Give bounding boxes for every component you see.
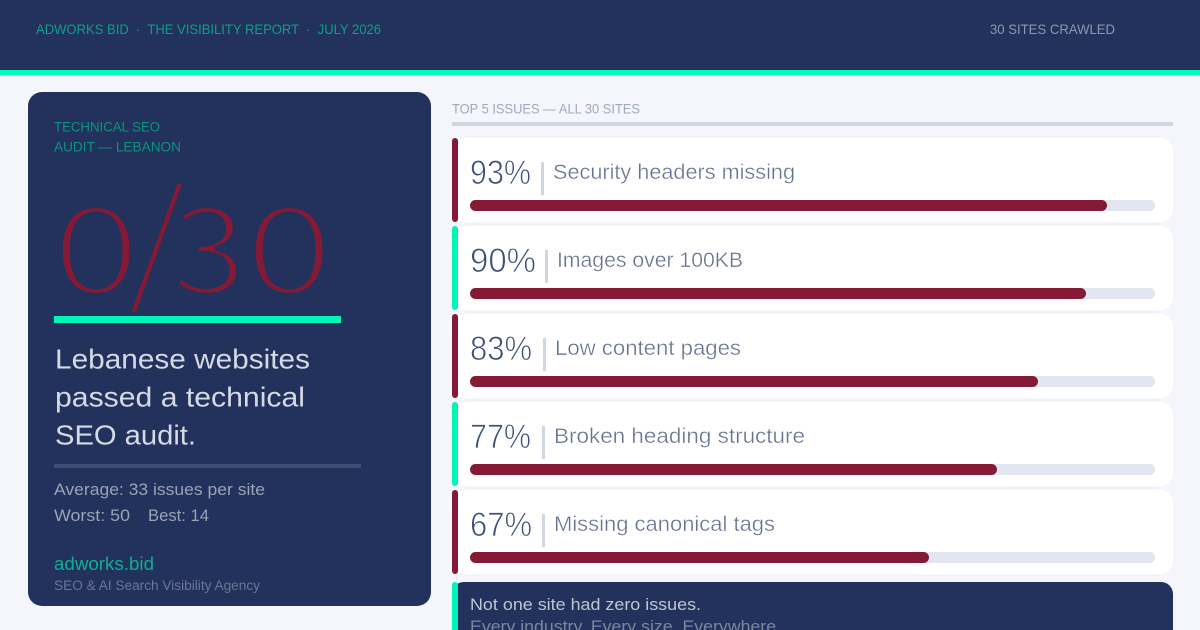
card: low content xyxy=(452,314,1173,398)
card: low content: 83% xyxy=(470,330,532,368)
card: security headers: 93% xyxy=(470,154,531,192)
big score 0/30 xyxy=(51,131,334,330)
card: images: 90% xyxy=(470,242,536,280)
panel eyebrow: TECHNICAL SEO xyxy=(54,120,160,134)
card: headings xyxy=(452,402,1173,486)
stats: Worst: 50 xyxy=(54,506,130,525)
section heading xyxy=(452,102,1173,126)
panel: summary xyxy=(28,92,431,606)
card: canonical: 67% xyxy=(470,506,532,544)
card: headings: 77% xyxy=(470,418,531,456)
big score 0/30: 3 xyxy=(171,154,247,330)
headline: passed a technical xyxy=(55,382,305,412)
card: headings: Broken heading structure xyxy=(554,425,805,448)
stats xyxy=(54,480,265,525)
panel eyebrow: AUDIT — LEBANON xyxy=(54,140,181,154)
big score 0/30: 0 xyxy=(244,153,334,330)
header site count: 30 SITES CRAWLED xyxy=(990,21,1115,37)
accent bar xyxy=(54,316,341,323)
card: security headers: Security headers missing xyxy=(553,161,795,184)
website link: adworks.bid xyxy=(54,554,154,574)
headline: Lebanese websites xyxy=(55,344,310,374)
header band xyxy=(0,0,1200,75)
divider xyxy=(54,464,361,468)
header title: ADWORKS BID · THE VISIBILITY REPORT · JULY 2026 xyxy=(36,21,381,37)
callout xyxy=(452,582,1173,630)
headline: SEO audit. xyxy=(55,420,196,450)
card: images xyxy=(452,226,1173,310)
callout text: Not one site had zero issues. xyxy=(470,595,701,614)
card: security headers xyxy=(452,138,1173,222)
headline xyxy=(55,344,310,450)
stats: Best: 14 xyxy=(148,506,209,525)
panel eyebrow xyxy=(54,120,181,154)
stats: Average: 33 issues per site xyxy=(54,480,265,499)
card: canonical: Missing canonical tags xyxy=(554,513,775,536)
tagline: SEO & AI Search Visibility Agency xyxy=(54,578,260,593)
big score 0/30: / xyxy=(126,131,188,330)
card: canonical xyxy=(452,490,1173,574)
card: images: Images over 100KB xyxy=(557,249,743,272)
card: low content: Low content pages xyxy=(555,337,741,360)
section heading: TOP 5 ISSUES — ALL 30 SITES xyxy=(452,102,640,116)
big score 0/30: 0 xyxy=(51,153,141,330)
